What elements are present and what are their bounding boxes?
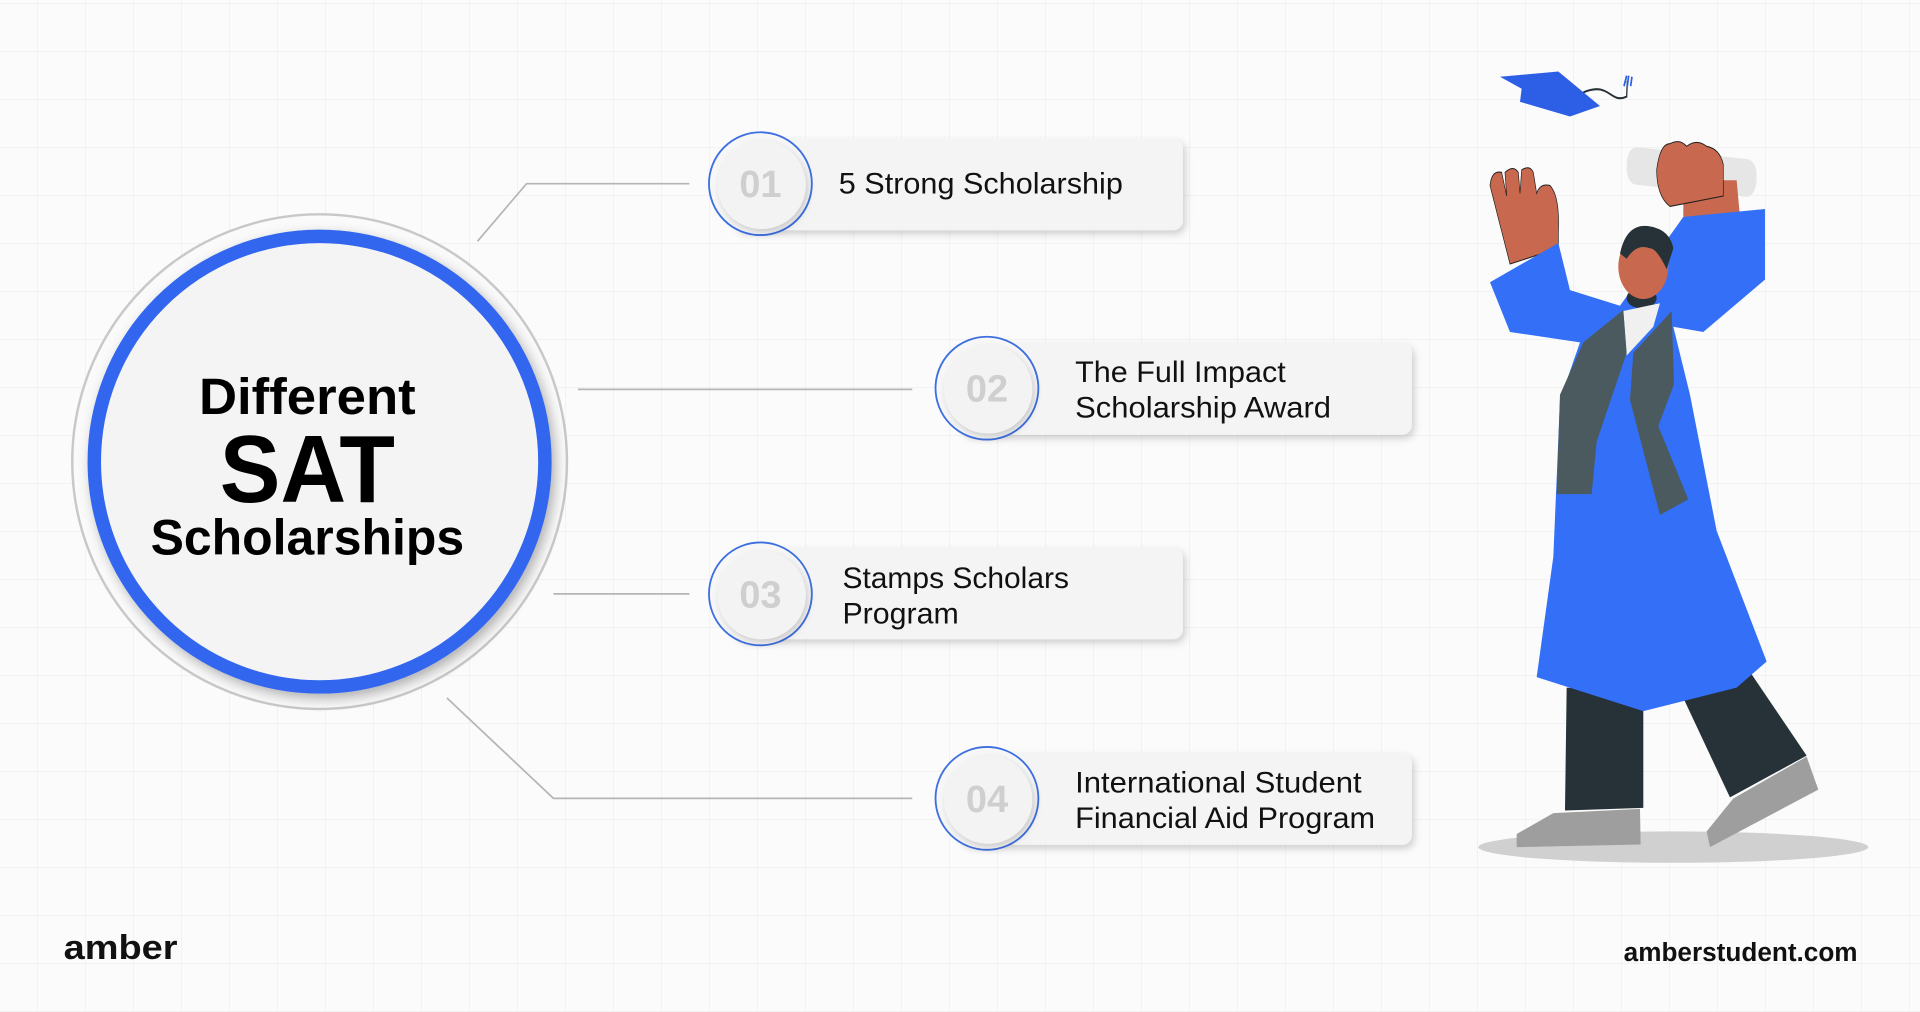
cap xyxy=(1500,72,1632,116)
gown xyxy=(1490,209,1767,711)
item 04: 04 xyxy=(966,779,1008,821)
item 03 xyxy=(709,542,1183,645)
item 02: The Full Impact xyxy=(1075,356,1286,389)
item 04: Financial Aid Program xyxy=(1075,802,1375,835)
shoes xyxy=(1517,809,1641,847)
item 03: Program xyxy=(842,597,959,630)
illustration: graduate xyxy=(1478,72,1868,863)
item 04 xyxy=(936,747,1412,850)
pants xyxy=(1565,688,1643,811)
title: Different xyxy=(199,367,416,425)
item 01: 5 Strong Scholarship xyxy=(839,167,1123,200)
item 02: 02 xyxy=(966,369,1008,411)
collar xyxy=(1623,303,1660,355)
item 03: 03 xyxy=(739,574,782,616)
item 04: International Student xyxy=(1075,766,1362,799)
item 02: Scholarship Award xyxy=(1075,392,1331,425)
connector lines xyxy=(447,184,912,798)
main circle xyxy=(72,214,567,709)
arms skin xyxy=(1683,180,1740,217)
item 02 xyxy=(936,337,1412,440)
logo: amber: amber xyxy=(64,929,178,967)
stole xyxy=(1557,310,1627,494)
diploma xyxy=(1626,146,1757,198)
item 03: Stamps Scholars xyxy=(842,562,1069,595)
title xyxy=(151,367,464,566)
title: Scholarships xyxy=(151,510,464,566)
item 01: 01 xyxy=(739,164,782,206)
website: amberstudent.com xyxy=(1624,939,1858,967)
neck and head xyxy=(1627,288,1657,308)
item 01 xyxy=(709,132,1183,235)
title: SAT xyxy=(220,417,395,523)
